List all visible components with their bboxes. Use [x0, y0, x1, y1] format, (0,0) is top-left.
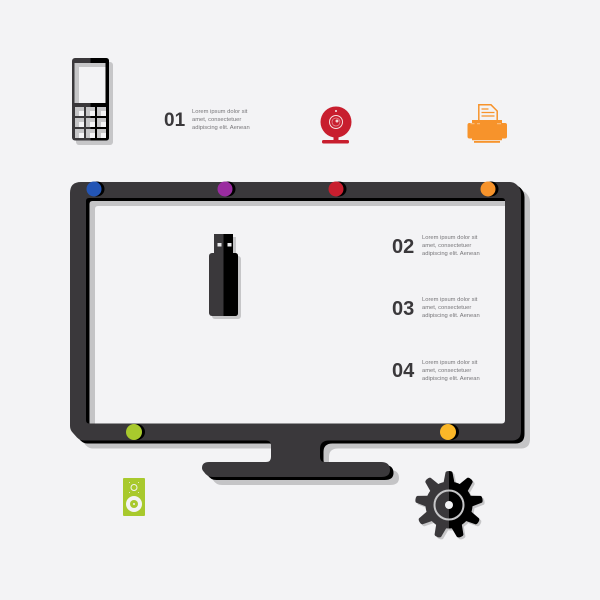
text block 04: Lorem ipsum dolor sit	[422, 360, 478, 366]
text block 02: Lorem ipsum dolor sit	[422, 235, 478, 241]
text block 01: Lorem ipsum dolor sit	[192, 109, 248, 115]
number 02: 02	[392, 236, 414, 258]
dot: green	[126, 424, 145, 440]
dot: red	[328, 182, 346, 196]
step 01	[164, 109, 250, 131]
number 04: 04	[392, 360, 415, 382]
text block 01: adipiscing elit. Aenean	[192, 125, 250, 131]
text block 03	[422, 297, 480, 319]
number 03: 03	[392, 298, 414, 320]
icon: printer	[468, 105, 507, 143]
dot: purple	[218, 182, 236, 196]
text block 03: amet, consectetuer	[422, 305, 471, 311]
text block 03: Lorem ipsum dolor sit	[422, 297, 478, 303]
step 03	[392, 297, 480, 320]
text block 04: adipiscing elit. Aenean	[422, 376, 480, 382]
dot: orange	[480, 182, 498, 196]
step 04	[392, 360, 480, 382]
text block 02: adipiscing elit. Aenean	[422, 251, 480, 257]
dot: yellow	[440, 424, 459, 440]
icon: webcam	[320, 106, 352, 144]
step 02	[392, 235, 480, 258]
icon: usb drive	[209, 234, 241, 319]
text block 04: amet, consectetuer	[422, 368, 471, 374]
text block 01: amet, consectetuer	[192, 117, 241, 123]
text block 04	[422, 360, 480, 382]
icon: speaker	[123, 478, 145, 516]
text block 01	[192, 109, 250, 131]
text block 02: amet, consectetuer	[422, 243, 471, 249]
text block 03: adipiscing elit. Aenean	[422, 313, 480, 319]
monitor	[70, 182, 530, 485]
number 01: 01	[164, 110, 186, 131]
icon: mobile phone	[72, 58, 113, 145]
icon: gear	[415, 471, 485, 541]
dot: blue	[86, 182, 104, 196]
text block 02	[422, 235, 480, 257]
